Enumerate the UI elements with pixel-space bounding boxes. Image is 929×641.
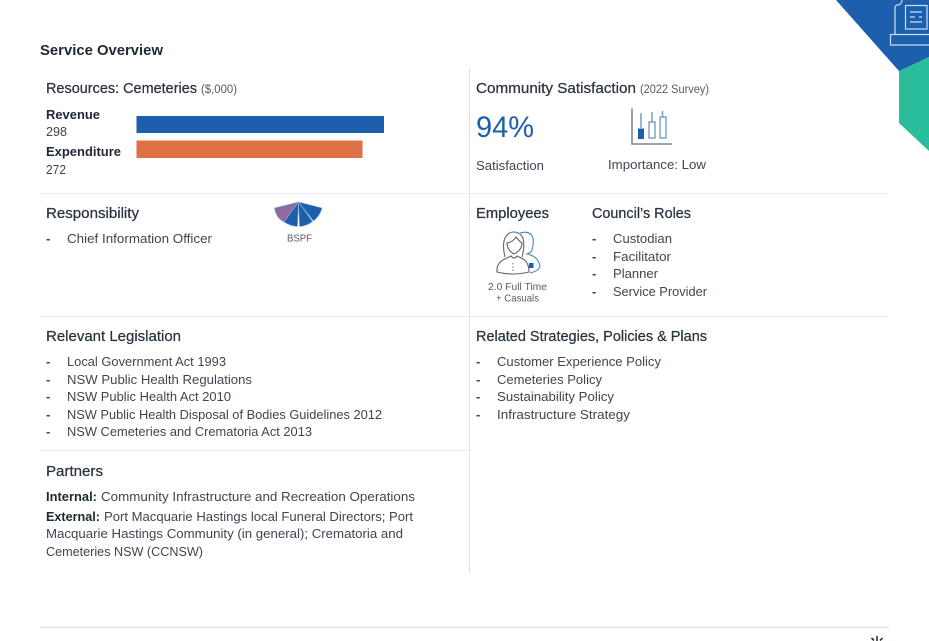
employees count: + Casuals (496, 292, 539, 304)
corner decoration (836, 0, 929, 151)
list: legislation: NSW Public Health Disposal of Bodies Guidelines 2012 (67, 407, 382, 422)
revenue label (46, 107, 100, 139)
heading: employees: Employees (476, 206, 549, 222)
list: roles: Facilitator (613, 249, 672, 264)
list: legislation: NSW Public Health Act 2010 (67, 389, 231, 404)
heading: community satisfaction (476, 81, 709, 97)
heading: community satisfaction: Community Satisfaction (476, 81, 636, 97)
importance label: Importance: Low (608, 157, 707, 172)
heading: responsibility: Responsibility (46, 206, 140, 222)
list: strategies: Customer Experience Policy (497, 354, 661, 369)
list: roles: - (592, 266, 596, 281)
heading: relevant legislation: Relevant Legislation (46, 329, 181, 345)
icon: employees (497, 232, 540, 274)
icon: importance candlesticks (632, 108, 672, 144)
panel: related strategies (476, 329, 707, 422)
BSPF label: BSPF (287, 232, 312, 244)
expenditure label (46, 144, 121, 177)
external partners: External: (46, 509, 100, 524)
list: strategies: - (476, 389, 480, 404)
list: strategies: Cemeteries Policy (497, 372, 602, 387)
employees count (488, 281, 547, 304)
list: roles: - (592, 231, 596, 246)
list: roles: - (592, 284, 596, 299)
panel: responsibility (46, 202, 322, 246)
panel: partners (46, 464, 416, 559)
icon: BSPF fan (274, 202, 322, 226)
satisfaction label: Satisfaction (476, 158, 544, 173)
heading: resources: Resources: Cemeteries (46, 81, 197, 97)
internal partners: Internal: (46, 489, 97, 504)
list: strategies (476, 354, 661, 422)
satisfaction figure: 94% (476, 111, 534, 144)
icon: headstone with plaque (890, 0, 929, 45)
list: strategies: - (476, 354, 480, 369)
list: legislation (46, 354, 382, 439)
employees count: 2.0 Full Time (488, 281, 547, 293)
panel: relevant legislation (46, 329, 382, 439)
external partners: Macquarie Hastings Community (in general); Crematoria and (46, 526, 403, 541)
heading: partners: Partners (46, 464, 103, 480)
list: roles: Service Provider (613, 284, 708, 299)
list: legislation: NSW Cemeteries and Crematoria Act 2013 (67, 424, 312, 439)
list: roles: Custodian (613, 231, 672, 246)
internal partners: Community Infrastructure and Recreation Operations (101, 489, 416, 504)
list: strategies: Infrastructure Strategy (497, 407, 631, 422)
heading: council's roles: Council’s Roles (592, 206, 691, 222)
heading: community satisfaction: (2022 Survey) (640, 84, 709, 96)
panel: employees (476, 206, 549, 304)
expenditure label: 272 (46, 162, 66, 177)
list: roles: Planner (613, 266, 659, 281)
list: strategies: - (476, 407, 480, 422)
list: legislation: - (46, 372, 50, 387)
list: roles: - (592, 249, 596, 264)
expenditure label: Expenditure (46, 144, 121, 159)
external partners: Port Macquarie Hastings local Funeral Directors; Port (104, 509, 413, 524)
list: legislation: - (46, 389, 50, 404)
heading: related strategies: Related Strategies, Policies & Plans (476, 329, 707, 345)
title: Service Overview (40, 42, 163, 59)
list: roles (592, 231, 708, 299)
revenue bar (136, 116, 384, 133)
external partners: Cemeteries NSW (CCNSW) (46, 544, 203, 559)
list: responsibility: Chief Information Officer (67, 231, 213, 246)
external partners (46, 509, 413, 559)
list: legislation: Local Government Act 1993 (67, 354, 226, 369)
panel: council's roles (592, 206, 708, 299)
heading: resources: ($,000) (201, 84, 237, 96)
revenue label: 298 (46, 124, 67, 139)
panel: resources (46, 81, 384, 177)
footer logo fragment (872, 636, 882, 641)
list: legislation: NSW Public Health Regulations (67, 372, 252, 387)
list: responsibility: - (46, 231, 50, 246)
list: strategies: Sustainability Policy (497, 389, 615, 404)
expenditure bar (136, 140, 362, 158)
list: strategies: - (476, 372, 480, 387)
revenue label: Revenue (46, 107, 100, 122)
list: legislation: - (46, 354, 50, 369)
panel: community satisfaction (476, 81, 709, 173)
list: legislation: - (46, 407, 50, 422)
list: legislation: - (46, 424, 50, 439)
